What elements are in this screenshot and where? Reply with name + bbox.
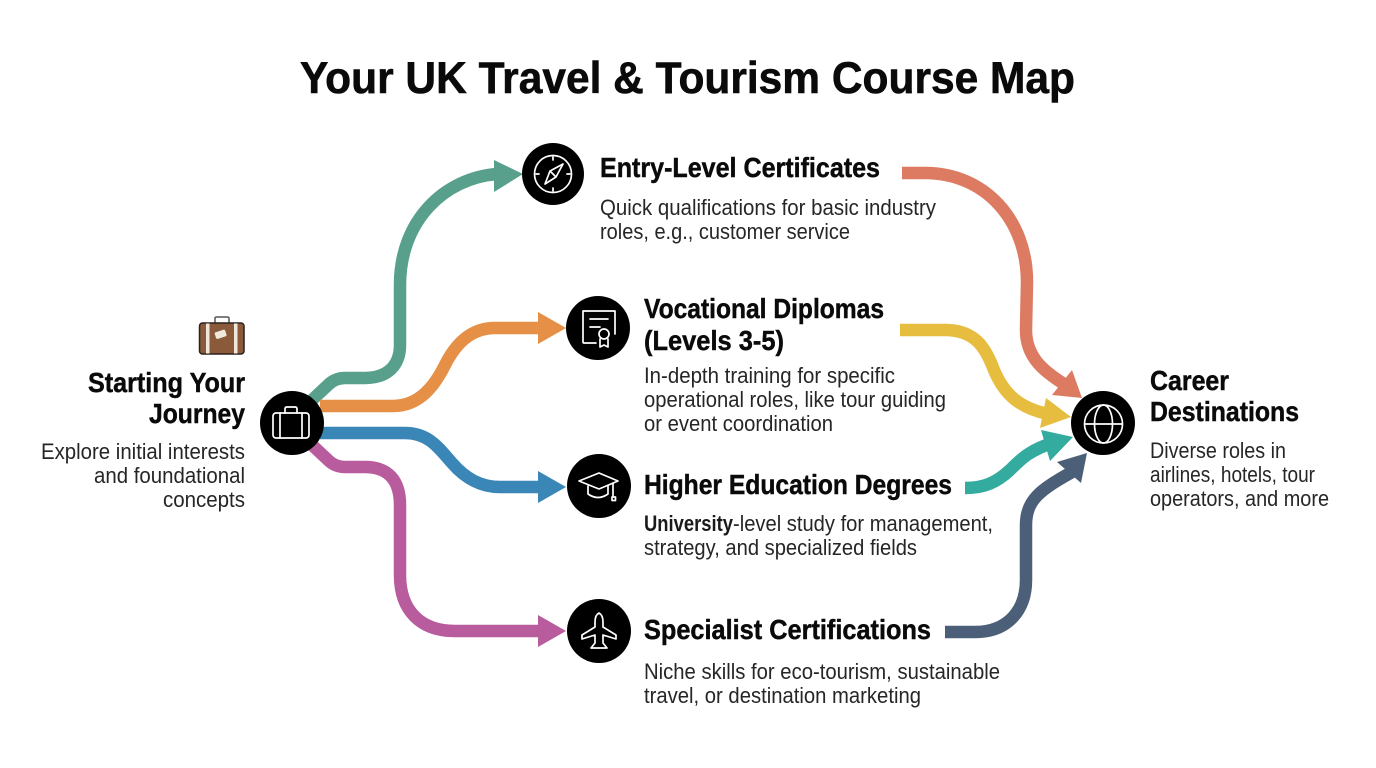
heading: higher education degrees: Higher Education Degrees <box>644 469 952 500</box>
text: specialist description: Niche skills for eco-tourism, sustainable <box>644 659 1000 684</box>
arrow: start to specialist certifications <box>312 445 566 647</box>
text: specialist description: travel, or destination marketing <box>644 683 921 708</box>
arrow: start to vocational diplomas <box>320 312 566 406</box>
icon: airplane <box>567 599 631 663</box>
text: vocational description: operational roles, like tour guiding <box>644 387 946 412</box>
text: entry-level description: Quick qualifications for basic industry <box>600 195 936 220</box>
text: higher education description: strategy, and specialized fields <box>644 535 917 560</box>
text: vocational description: In-depth training for specific <box>644 363 895 388</box>
text: vocational description <box>644 363 946 436</box>
panel: specialist certifications <box>567 599 1000 708</box>
arrow: diplomas to careers <box>900 330 1071 428</box>
text: starting description: concepts <box>163 487 245 512</box>
panel: career destinations <box>1071 365 1329 511</box>
heading: specialist certifications: Specialist Certifications <box>644 614 931 645</box>
text: starting description: and foundational <box>94 463 245 488</box>
icon: graduation cap <box>567 454 631 518</box>
text: higher education description <box>644 511 993 560</box>
heading: vocational diplomas <box>644 293 884 356</box>
heading: career destinations <box>1150 365 1299 427</box>
heading: career destinations: Destinations <box>1150 396 1299 427</box>
text: career description: airlines, hotels, tour <box>1150 462 1315 487</box>
text: entry-level description <box>600 195 936 244</box>
title: Your UK Travel & Tourism Course Map <box>300 54 1075 103</box>
heading: career destinations: Career <box>1150 365 1229 396</box>
text: career description: operators, and more <box>1150 486 1329 511</box>
arrow: certificates to careers <box>902 173 1082 398</box>
icon: start briefcase <box>260 391 324 455</box>
panel: starting your journey <box>41 317 324 512</box>
text: starting description: Explore initial interests <box>41 439 245 464</box>
text: career description: Diverse roles in <box>1150 438 1286 463</box>
icon: compass <box>522 143 584 205</box>
text: starting description <box>41 439 245 512</box>
icon: diploma <box>566 296 630 360</box>
icon: globe <box>1071 391 1135 455</box>
arrow: specialist to careers <box>945 453 1087 632</box>
arrow: start to entry-level certificates <box>312 160 523 400</box>
text: career description <box>1150 438 1329 511</box>
panel: entry-level certificates <box>522 143 936 244</box>
icon: brown suitcase <box>200 317 244 354</box>
text: vocational description: or event coordination <box>644 411 833 436</box>
heading: entry-level certificates: Entry-Level Certificates <box>600 152 880 183</box>
text: specialist description <box>644 659 1000 708</box>
heading: vocational diplomas: (Levels 3-5) <box>644 325 784 356</box>
heading: starting your journey <box>88 367 246 429</box>
arrow: start to higher education degrees <box>320 433 566 503</box>
heading: starting your journey: Journey <box>149 398 246 429</box>
panel: higher education degrees <box>567 454 993 560</box>
text: higher education description: University <box>644 511 734 536</box>
heading: starting your journey: Starting Your <box>88 367 245 398</box>
text: higher education description: -level study for management, <box>733 511 993 536</box>
heading: vocational diplomas: Vocational Diplomas <box>644 293 884 324</box>
text: entry-level description: roles, e.g., customer service <box>600 219 850 244</box>
panel: vocational diplomas <box>566 293 946 436</box>
arrow: degrees to careers <box>965 430 1073 488</box>
